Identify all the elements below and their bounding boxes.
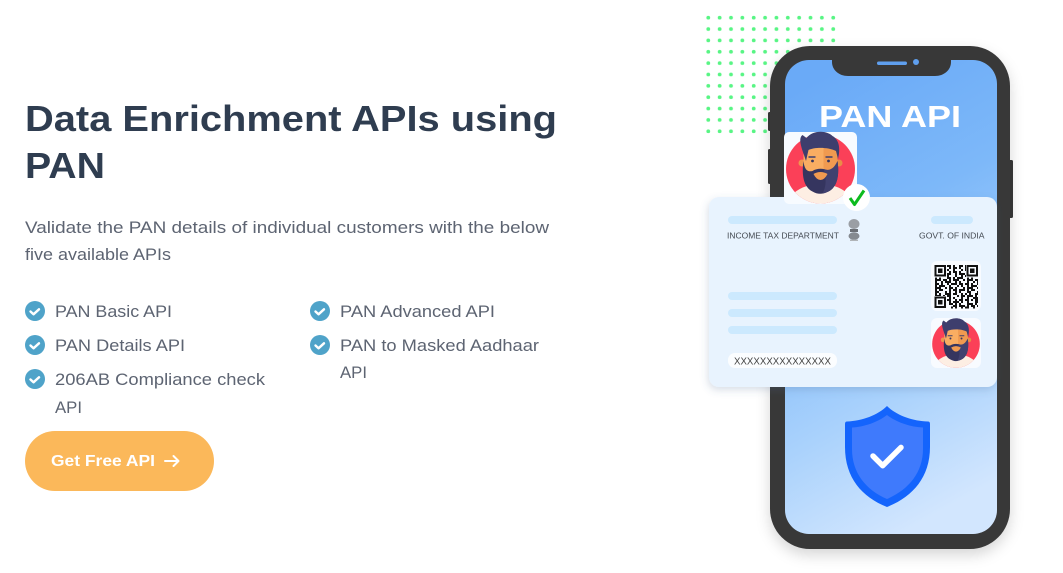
dotted decoration [703,12,839,137]
QR code [931,261,981,311]
notch [832,58,951,76]
PAN number pill: XXXXXXXXXXXXXXX [734,356,831,368]
feature list: right column [310,301,540,382]
phone [768,46,1013,549]
list item: PAN Basic API [25,301,172,321]
card text bars [728,292,837,334]
description text: five available APIs [25,246,171,264]
description text [25,219,549,264]
list item: 206AB Compliance check API: API [55,399,82,417]
speaker [877,62,907,65]
heading [25,98,557,186]
phone screen [785,60,997,534]
button: Get Free API [25,431,214,491]
list item: PAN to Masked Aadhaar API [310,335,540,382]
icon: shield [845,406,930,507]
list item: 206AB Compliance check API [25,369,266,417]
icon: arrow [165,456,178,466]
PAN card [709,197,997,387]
list item: 206AB Compliance check API: 206AB Compliance check [55,371,266,389]
screen title: PAN API [819,99,961,134]
avatar with verification tick [782,132,870,211]
list item: PAN Advanced API: PAN Advanced API [340,303,495,321]
heading: Data Enrichment APIs using [25,98,557,139]
list item: PAN to Masked Aadhaar API: PAN to Masked Aadhaar [340,337,540,355]
description text: Validate the PAN details of individual customers with the below [25,219,549,237]
icon: green check badge [843,184,870,211]
list item: PAN to Masked Aadhaar API: API [340,364,367,382]
QR finder patterns [934,264,979,309]
feature list: left column [25,301,266,417]
card header bars [728,216,973,224]
list item: PAN Basic API: PAN Basic API [55,303,172,321]
list item: PAN Details API: PAN Details API [55,337,185,355]
list item: PAN Advanced API [310,301,495,321]
card label: govt of India: GOVT. OF INDIA [919,232,985,240]
card photo [930,318,982,370]
list item: PAN Details API [25,335,185,355]
heading: PAN [25,145,105,186]
button: Get Free API: Get Free API [51,453,155,470]
card label: income tax department: INCOME TAX DEPARTMENT [727,232,839,240]
camera [913,59,919,65]
icon: state emblem [848,219,860,241]
